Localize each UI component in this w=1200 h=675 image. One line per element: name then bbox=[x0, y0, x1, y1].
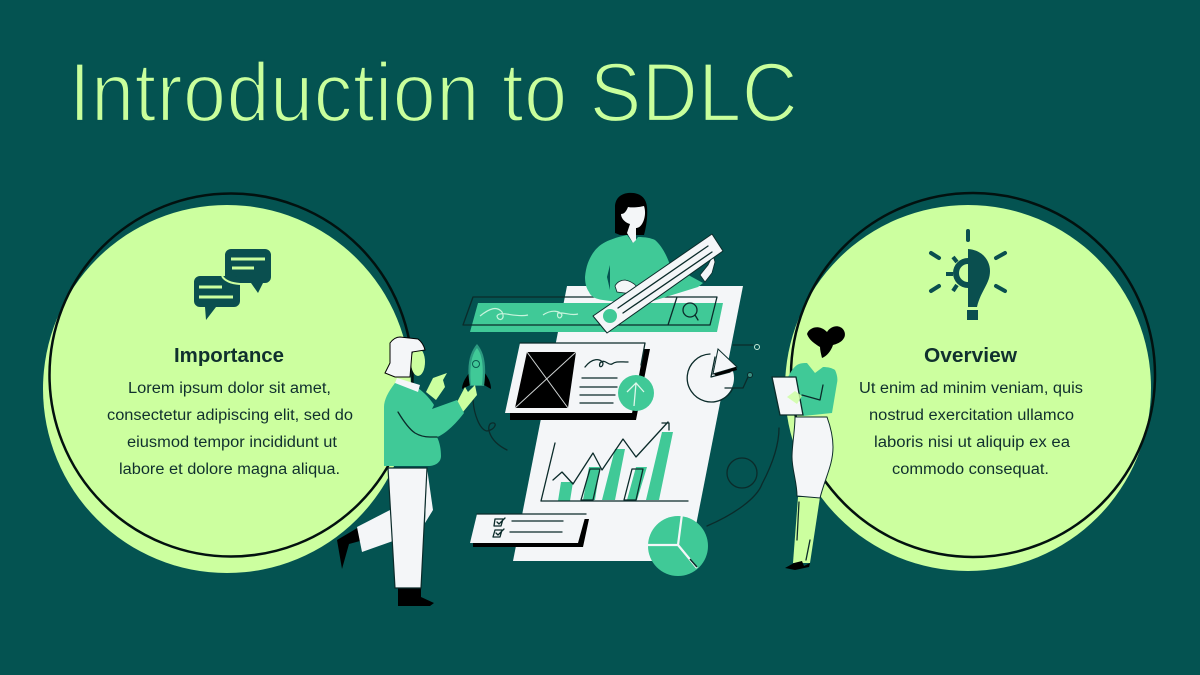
text block: importance bbox=[107, 380, 353, 478]
person: woman with ruler bbox=[585, 193, 715, 305]
hair bun bbox=[807, 326, 845, 358]
person: woman with clipboard bbox=[772, 326, 845, 570]
heading: overview: Overview bbox=[924, 345, 1017, 367]
pie chart with connectors bbox=[686, 344, 760, 402]
person: man with rocket bbox=[337, 337, 477, 606]
swirl line bbox=[707, 428, 779, 526]
checklist card bbox=[470, 514, 589, 547]
text block: overview: Ut enim ad minim veniam, quis bbox=[859, 380, 1083, 397]
icon: rocket bbox=[462, 344, 491, 389]
text block: overview: laboris nisi ut aliquip ex ea bbox=[874, 434, 1070, 451]
text block: overview bbox=[859, 380, 1083, 478]
heading: importance: Importance bbox=[174, 345, 284, 367]
icon: chat bubbles bbox=[194, 249, 271, 320]
title: Introduction to SDLC bbox=[69, 46, 798, 140]
panel: importance bbox=[43, 194, 412, 573]
growth chart bbox=[541, 422, 688, 501]
text block: importance: labore et dolore magna aliqua. bbox=[119, 461, 340, 478]
ruler slider bbox=[593, 234, 723, 333]
icon: light bulb and gear bbox=[931, 231, 1005, 320]
panel: overview bbox=[785, 193, 1155, 571]
search bar bbox=[463, 297, 723, 332]
pie chart: bottom bbox=[647, 514, 708, 576]
image card bbox=[505, 343, 654, 420]
squiggle under rocket bbox=[473, 400, 507, 450]
illustration: document page bbox=[513, 286, 743, 561]
text block: importance: Lorem ipsum dolor sit amet, bbox=[128, 380, 331, 397]
text block: overview: commodo consequat. bbox=[892, 461, 1049, 478]
text block: importance: consectetur adipiscing elit, sed do bbox=[107, 407, 353, 424]
text block: overview: nostrud exercitation ullamco bbox=[869, 407, 1074, 424]
text block: importance: eiusmod tempor incididunt ut bbox=[127, 434, 338, 451]
